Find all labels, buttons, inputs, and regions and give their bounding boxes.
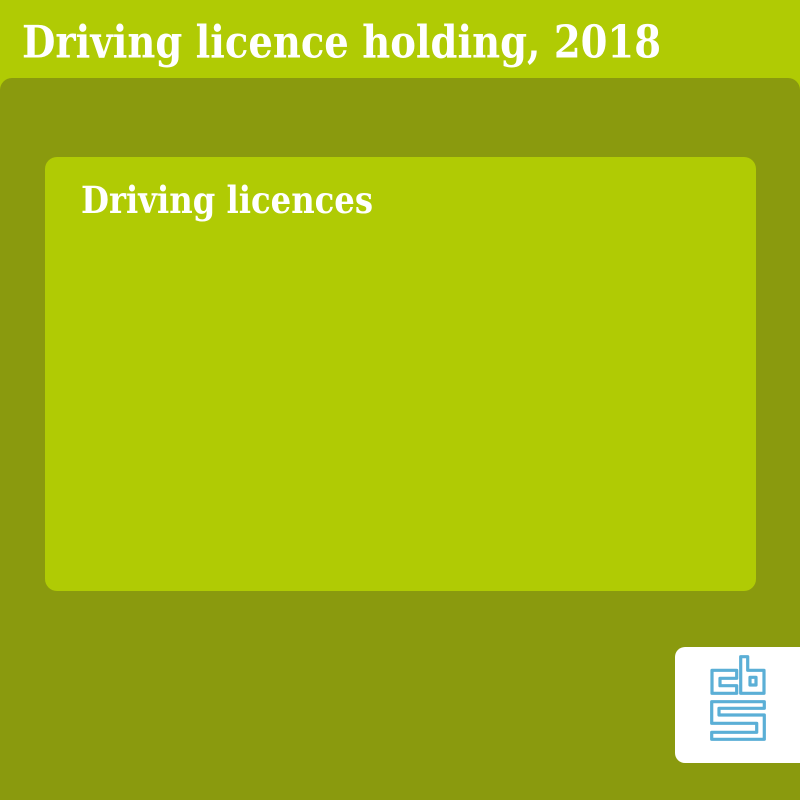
title: Driving licence holding, 2018 xyxy=(22,16,661,68)
panel: driving licences xyxy=(45,157,756,591)
panel heading: Driving licences xyxy=(81,178,373,222)
logo card xyxy=(675,647,800,763)
logo: cbs xyxy=(675,647,800,763)
logo mark xyxy=(712,657,764,739)
